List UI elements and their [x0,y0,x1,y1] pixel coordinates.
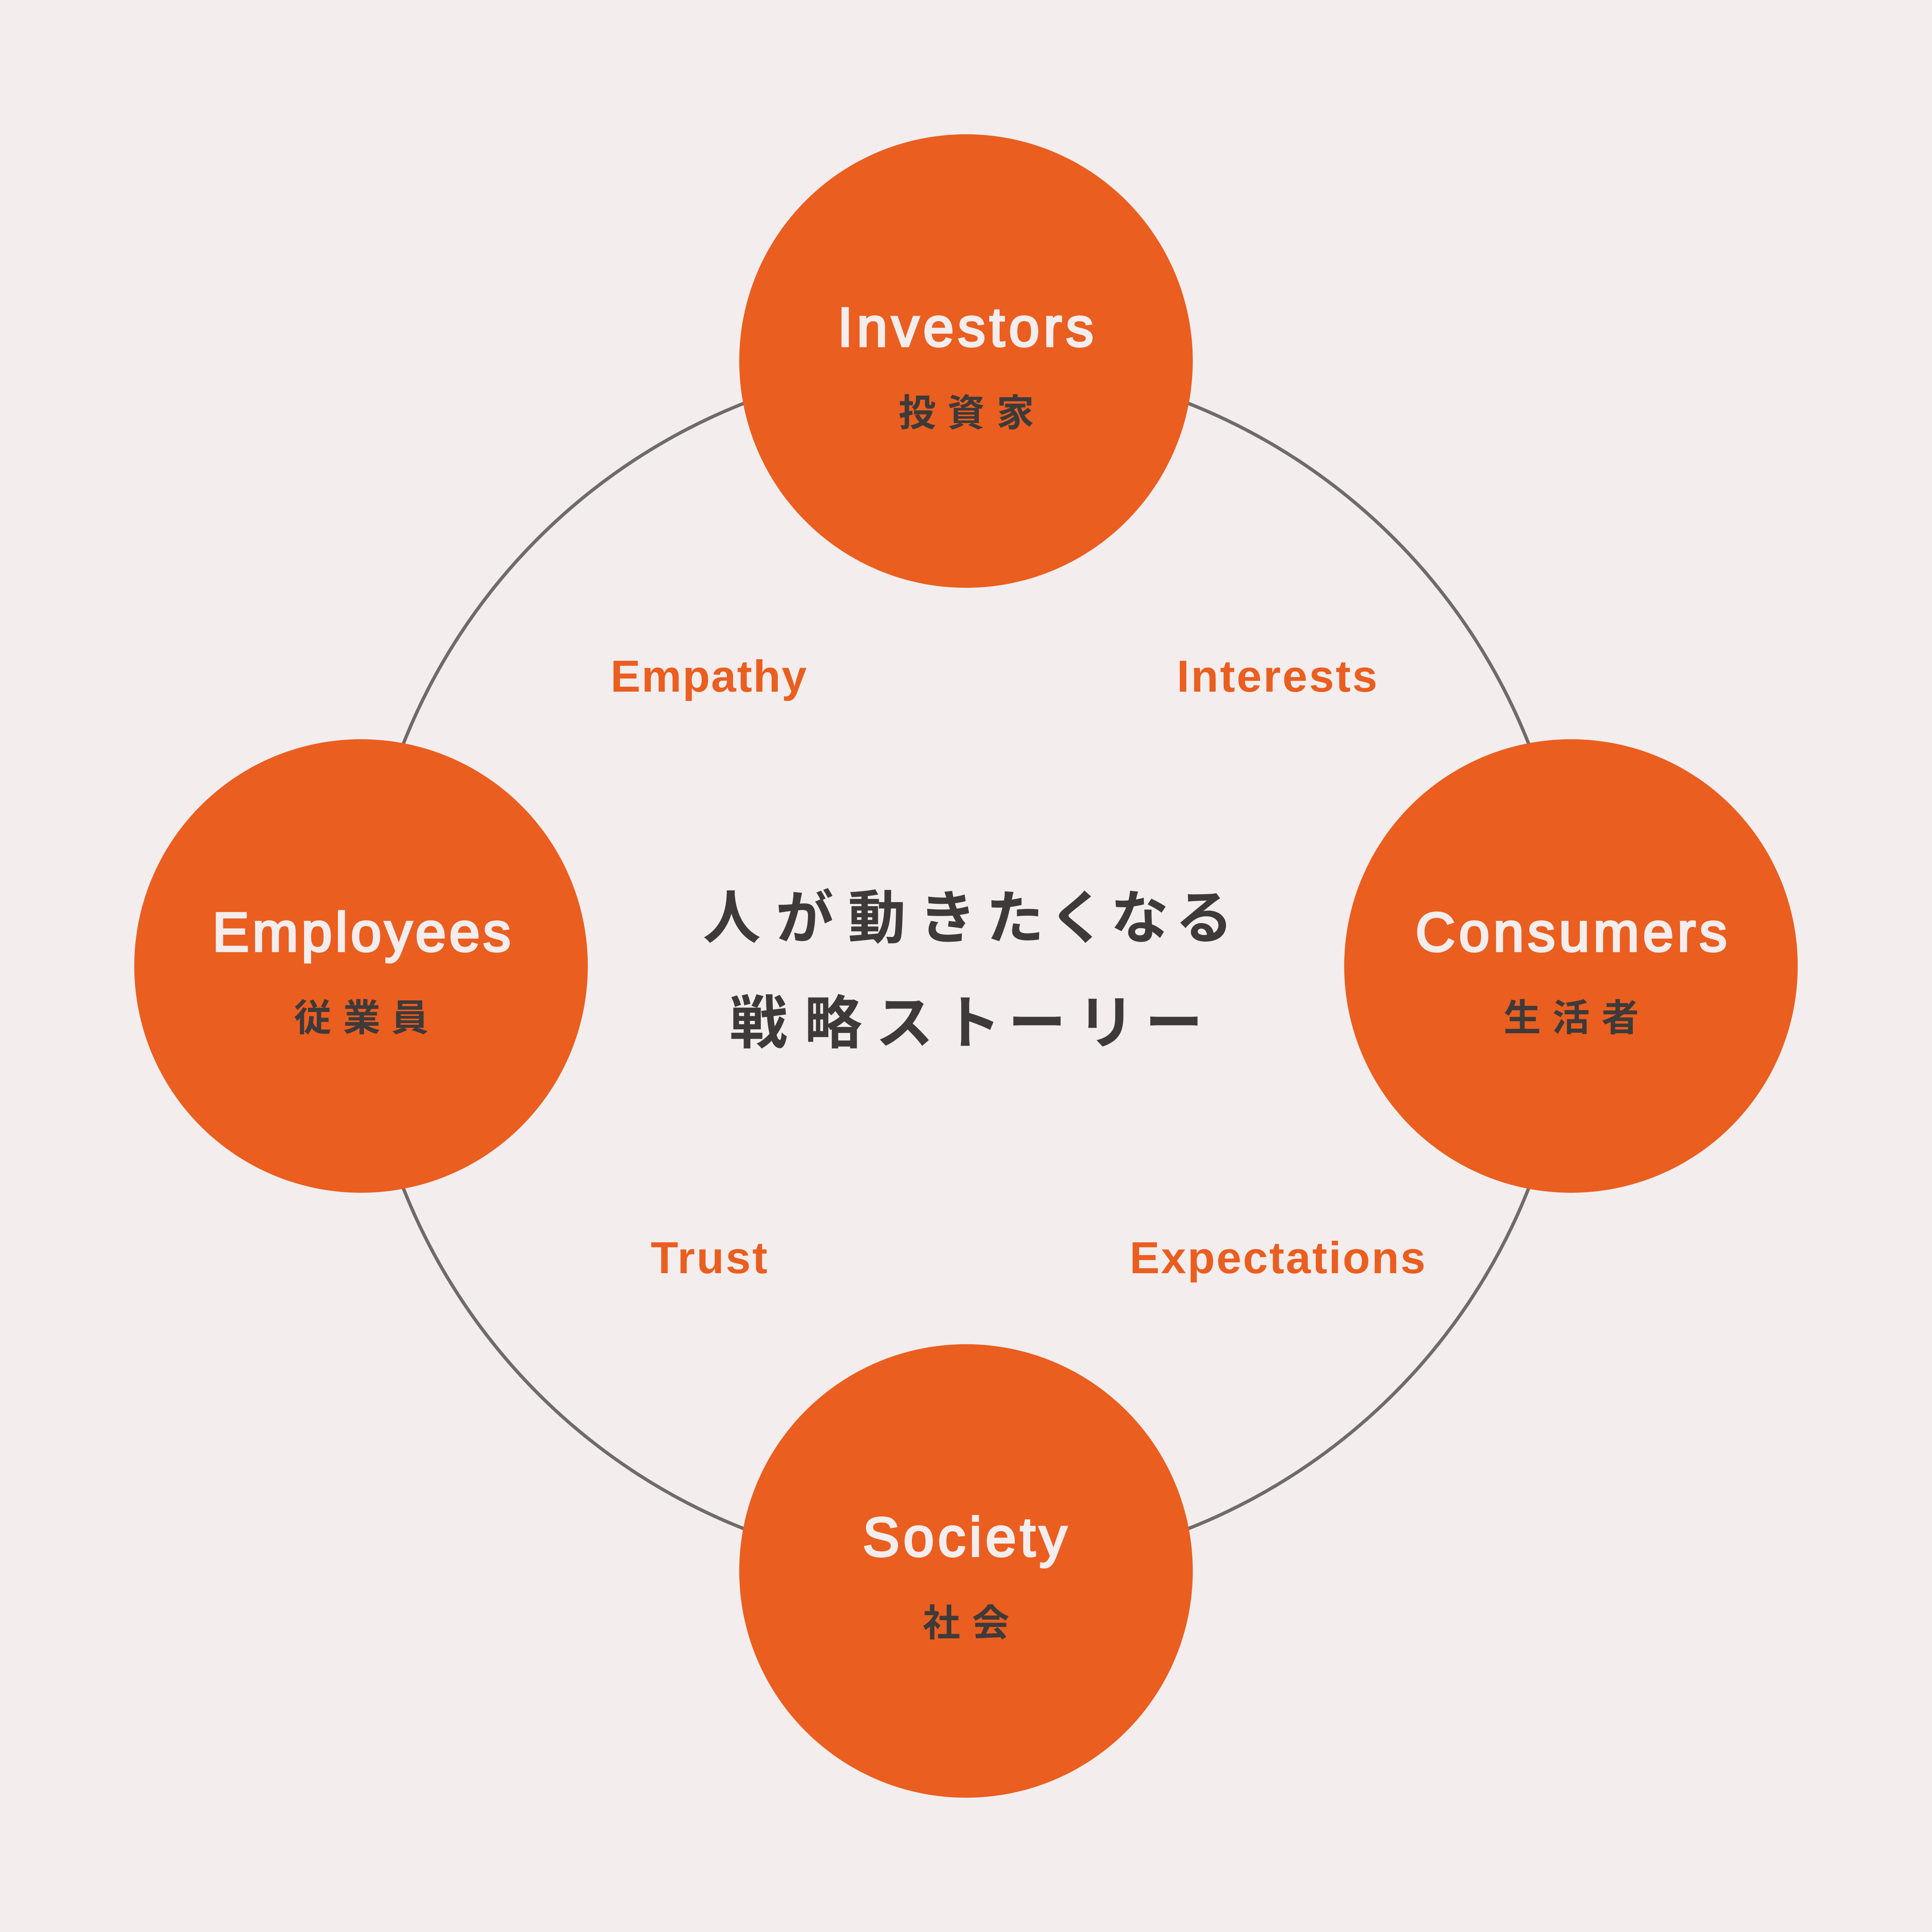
keyword: Expectations: Expectations [1129,1233,1425,1283]
node: Society: Society [863,1507,1067,1568]
centre title [703,886,1233,1056]
keyword: Trust: Trust [651,1233,767,1283]
node: Investors [739,134,1193,588]
node: Society [739,1344,1193,1798]
node: Consumers: 生活者 [1503,997,1639,1039]
node: Investors: Investors [838,297,1094,358]
node: Consumers [1344,739,1798,1193]
node: Employees [134,739,588,1193]
node: Consumers: Consumers [1415,901,1727,963]
centre title: 人が動きたくなる [703,886,1233,951]
keyword: Empathy: Empathy [611,651,807,701]
node: Employees: 従業員 [294,997,429,1039]
node: Society: 社会 [923,1602,1009,1644]
keyword: Interests: Interests [1177,651,1377,701]
node: Investors: 投資家 [898,392,1034,434]
node: Employees: Employees [213,901,511,963]
connecting ring [361,361,1571,1571]
centre title: 戦略ストーリー [730,991,1203,1056]
